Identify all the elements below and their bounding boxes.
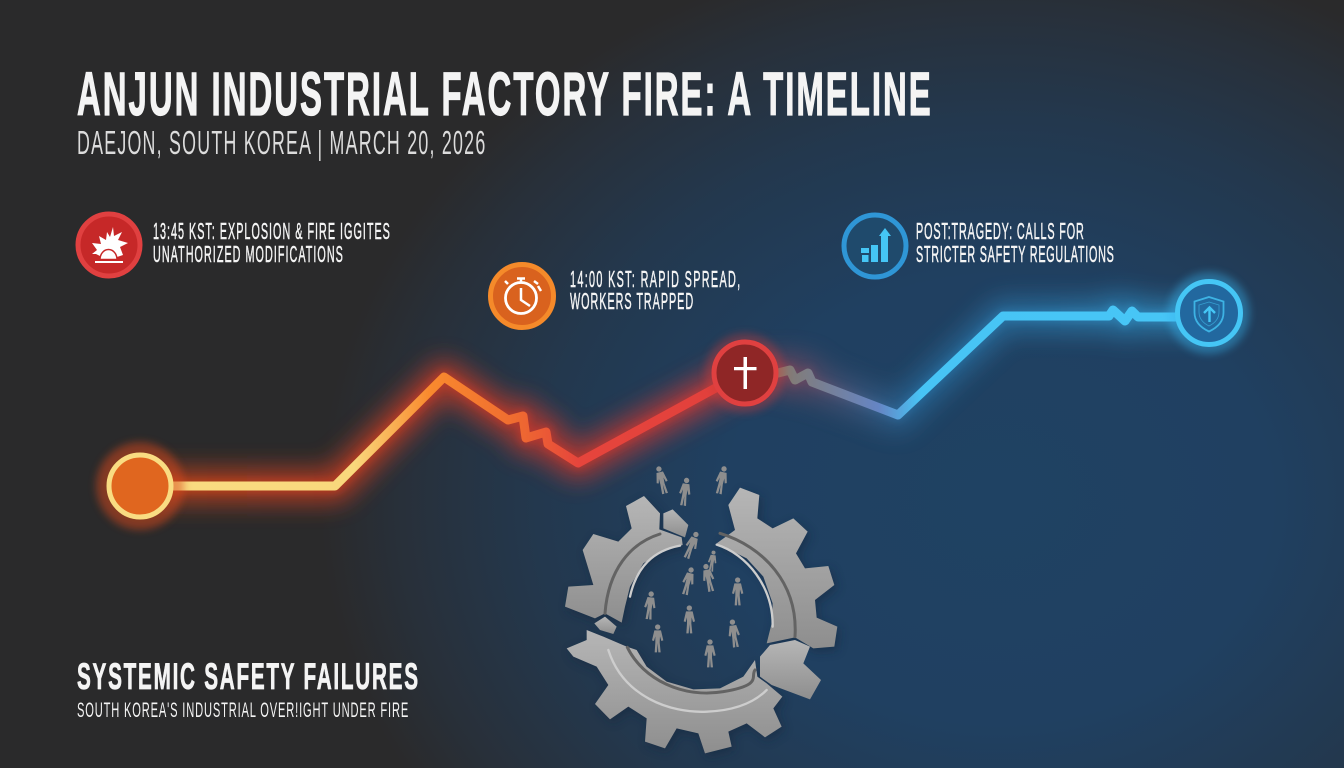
event 3 text: STRICTER SAFETY REGULATIONS: [916, 242, 1114, 267]
title: ANJUN INDUSTRIAL FACTORY FIRE: A TIMELINE: [77, 61, 931, 129]
event 2 text: WORKERS TRAPPED: [570, 289, 693, 314]
gear shadow: [568, 491, 840, 757]
icon: stopwatch: [490, 264, 554, 328]
gear pieces: [565, 488, 837, 753]
workers: [643, 465, 743, 667]
event 2 text: 14:00 KST: RAPID SPREAD,: [570, 267, 740, 292]
timeline line with glow: [140, 310, 1209, 486]
timeline node: start: [96, 442, 184, 530]
event 1 text: 13:45 KST: EXPLOSION & FIRE IGGITES: [153, 219, 390, 244]
timeline node: shield: [1168, 272, 1250, 354]
event 1 text: [153, 219, 390, 267]
subtitle: DAEJON, SOUTH KOREA | MARCH 20, 2026: [77, 124, 485, 161]
bottom subheading: SOUTH KOREA'S INDUSTRIAL OVER!IGHT UNDER FIRE: [77, 698, 408, 722]
event 3: post-tragedy: [844, 215, 1114, 277]
event 3 text: POST:TRAGEDY: CALLS FOR: [916, 219, 1084, 244]
event 3 text: [916, 219, 1114, 267]
event 1: explosion: [78, 214, 390, 276]
event 2: rapid spread: [490, 264, 740, 328]
broken gear with workers: [565, 465, 840, 757]
icon: rising bars with arrow: [844, 215, 906, 277]
bottom heading: SYSTEMIC SAFETY FAILURES: [77, 657, 418, 698]
event 1 text: UNATHORIZED MODIFICATIONS: [153, 242, 343, 267]
timeline node: fatalities cross: [705, 333, 785, 413]
gear grooves: [605, 533, 795, 712]
event 2 text: [570, 267, 740, 314]
icon: explosion: [78, 214, 140, 276]
